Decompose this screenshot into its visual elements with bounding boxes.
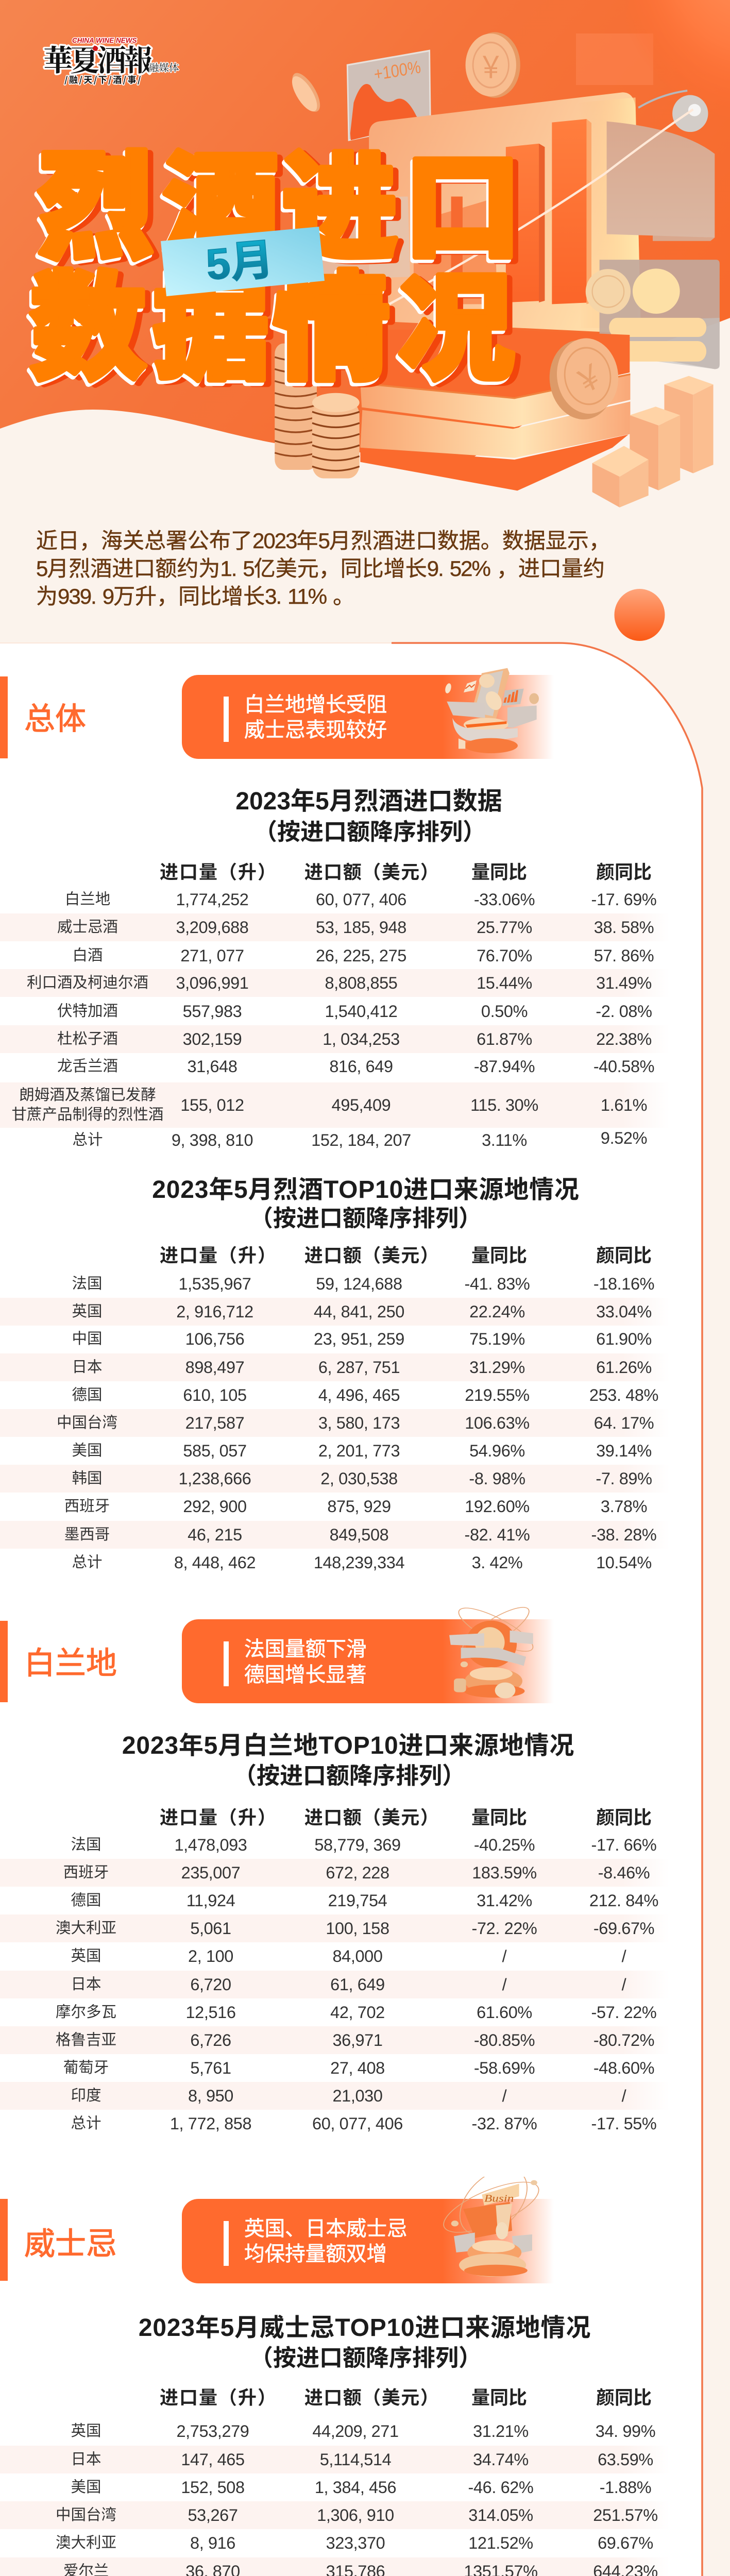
intro text: 为939.9万升，同比增长3.11%。 [36, 584, 354, 608]
glass ball [638, 91, 708, 132]
table 3: brandy top 10 origins: 61, 649 [330, 1975, 385, 1994]
table 3: brandy top 10 origins: 235,007 [181, 1863, 240, 1882]
table 3: brandy top 10 origins: 日本 [71, 1976, 101, 1993]
table 1: spirits: 816, 649 [329, 1057, 393, 1076]
table 3: brandy top 10 origins: 212. 84% [589, 1891, 658, 1910]
table 4: whisky top 10 origins: 63.59% [598, 2450, 653, 2469]
section: overall [0, 675, 550, 759]
table 1: spirits: 1, 034,253 [322, 1030, 400, 1048]
table 1: spirits: -87.94% [474, 1057, 535, 1076]
section: whisky [0, 2199, 550, 2283]
banner: 均保持量额双增 [244, 2243, 387, 2265]
table 2: spirits top 10 origins: 量同比 [471, 1245, 527, 1266]
table 3: brandy top 10 origins: 61.60% [477, 2003, 532, 2022]
table 4: whisky top 10 origins: 152, 508 [181, 2478, 245, 2497]
table 1: spirits: 38. 58% [594, 918, 654, 937]
table 3: brandy top 10 origins: -32. 87% [472, 2114, 537, 2133]
intro text [36, 529, 610, 608]
banner icon: folder and pedestal: Busin [484, 2193, 514, 2204]
title: table 4 [139, 2314, 591, 2371]
logo: 融媒体 [149, 60, 179, 74]
table 2: spirits top 10 origins: 德国 [72, 1386, 102, 1403]
coin stack left [275, 344, 317, 470]
table 3: brandy top 10 origins: 183.59% [472, 1863, 537, 1882]
title: table 2 [152, 1176, 580, 1231]
table 1: spirits [0, 861, 656, 1149]
title: table 4: 2023年5月威士忌TOP10进口来源地情况 [139, 2314, 591, 2342]
table 3: brandy top 10 origins: 5,061 [190, 1919, 231, 1938]
table 2: spirits top 10 origins: 2, 030,538 [320, 1469, 398, 1488]
table 3: brandy top 10 origins: 42, 702 [330, 2003, 385, 2022]
table 3: brandy top 10 origins: 量同比 [471, 1807, 527, 1828]
table 4: whisky top 10 origins: 量同比 [471, 2387, 527, 2408]
table 4: whisky top 10 origins: 2,753,279 [176, 2422, 249, 2441]
table 2: spirits top 10 origins: 23, 951, 259 [314, 1330, 404, 1348]
table 2: spirits top 10 origins: 22.24% [469, 1302, 525, 1321]
table 2: spirits top 10 origins: 西班牙 [64, 1498, 110, 1515]
table 2: spirits top 10 origins: 898,497 [185, 1358, 244, 1377]
table 1: spirits: 白酒 [72, 947, 103, 964]
table 1: spirits: 155, 012 [180, 1096, 244, 1114]
accent bar [0, 2199, 8, 2281]
table 3: brandy top 10 origins: 1, 772, 858 [170, 2114, 251, 2133]
table 3: brandy top 10 origins: -58.69% [474, 2059, 535, 2077]
banner: 德国增长显著 [244, 1664, 366, 1686]
table 2: spirits top 10 origins: 849,508 [330, 1526, 388, 1544]
logo [42, 37, 179, 86]
banner [182, 2199, 554, 2283]
table 2: spirits top 10 origins: -18.16% [593, 1275, 654, 1293]
table 2: spirits top 10 origins: 总计 [72, 1554, 102, 1571]
table 1: spirits: 31.49% [596, 974, 652, 992]
table 4: whisky top 10 origins: 美国 [71, 2479, 101, 2496]
table 3: brandy top 10 origins: 摩尔多瓦 [56, 2004, 116, 2021]
table 1: spirits: 量同比 [471, 861, 527, 883]
table 3: brandy top 10 origins: 印度 [71, 2087, 101, 2104]
month badge: 5月 [204, 235, 276, 289]
table 4: whisky top 10 origins: 进口额（美元） [304, 2387, 439, 2408]
table 1: spirits: 龙舌兰酒 [57, 1058, 118, 1075]
table 3: brandy top 10 origins: -57. 22% [591, 2003, 656, 2022]
table 1: spirits: 总计 [72, 1131, 103, 1148]
table 2: spirits top 10 origins: 3, 580, 173 [318, 1414, 400, 1432]
hero background [0, 0, 730, 456]
table 2: spirits top 10 origins: 韩国 [72, 1470, 102, 1487]
table 1: spirits: 3.11% [482, 1131, 527, 1149]
table 4: whisky top 10 origins: 颜同比 [596, 2387, 652, 2408]
table 1: spirits: 31,648 [187, 1057, 237, 1076]
table 4: whisky top 10 origins: 进口量（升） [160, 2387, 277, 2408]
banner: 白兰地增长受阻 [244, 693, 387, 716]
table 4: whisky top 10 origins: 323,370 [326, 2534, 385, 2552]
table 4: whisky top 10 origins: -46. 62% [468, 2478, 533, 2497]
coin top [466, 32, 520, 98]
table 3: brandy top 10 origins: 进口量（升） [160, 1807, 277, 1828]
table 3: brandy top 10 origins: 法国 [71, 1836, 101, 1853]
table 1: spirits: 557,983 [183, 1002, 242, 1021]
table 2: spirits top 10 origins: -8. 98% [469, 1469, 525, 1488]
table 2: spirits top 10 origins: 46, 215 [188, 1526, 242, 1544]
table 2: spirits top 10 origins: 33.04% [596, 1302, 652, 1321]
table 3: brandy top 10 origins: -80.72% [593, 2031, 654, 2049]
table 3: brandy top 10 origins: 100, 158 [326, 1919, 389, 1938]
table 3: brandy top 10 origins: 21,030 [332, 2087, 382, 2105]
table 1: spirits: 1.61% [601, 1096, 647, 1114]
table 4: whisky top 10 origins: 31.21% [473, 2422, 529, 2441]
table 2: spirits top 10 origins: 61.90% [596, 1330, 652, 1348]
table 1: spirits: 76.70% [477, 946, 532, 965]
section label: 白兰地 [24, 1646, 117, 1681]
table 3: brandy top 10 origins: 5,761 [190, 2059, 231, 2077]
logo: 華夏酒報 [43, 37, 153, 79]
table 1: spirits: 利口酒及柯迪尔酒 [27, 974, 148, 991]
orange ellipse [614, 589, 665, 641]
table 1: spirits: 8,808,855 [325, 974, 397, 992]
table 2: spirits top 10 origins: 292, 900 [183, 1497, 247, 1516]
table 3: brandy top 10 origins: 27, 408 [330, 2059, 385, 2077]
table 1: spirits: 60, 077, 406 [316, 890, 406, 909]
table 3: brandy top 10 origins: / [622, 1947, 626, 1965]
table 3: brandy top 10 origins: -48.60% [593, 2059, 654, 2077]
table 2: spirits top 10 origins: 中国台湾 [57, 1414, 117, 1431]
section: brandy [0, 1619, 550, 1703]
table 1: spirits: 9.52% [601, 1129, 647, 1147]
intro text: 近日，海关总署公布了2023年5月烈酒进口数据。数据显示， [36, 529, 610, 553]
table 1: spirits: 甘蔗产品制得的烈性酒 [11, 1106, 164, 1123]
table 2: spirits top 10 origins: 1,238,666 [178, 1469, 251, 1488]
table 3: brandy top 10 origins: 6,720 [190, 1975, 231, 1994]
table 3: brandy top 10 origins: 西班牙 [63, 1864, 109, 1881]
big yen coin [538, 324, 630, 433]
title: table 2: 2023年5月烈酒TOP10进口来源地情况 [152, 1176, 580, 1204]
hero illustration [274, 32, 720, 507]
table 4: whisky top 10 origins: 澳大利亚 [56, 2534, 116, 2551]
title: table 3: （按进口额降序排列） [233, 1762, 465, 1789]
month badge [161, 227, 325, 296]
table 4: whisky top 10 origins [0, 2387, 658, 2576]
table 1: spirits: -40.58% [593, 1057, 654, 1076]
stacked platform [360, 330, 630, 490]
table 4: whisky top 10 origins: 5,114,514 [320, 2450, 391, 2469]
table 2: spirits top 10 origins: 192.60% [465, 1497, 530, 1516]
table 4: whisky top 10 origins: 中国台湾 [56, 2506, 116, 2523]
accent bar [0, 676, 8, 758]
table 3: brandy top 10 origins: / [502, 1975, 506, 1994]
table 1: spirits: 1,540,412 [325, 1002, 397, 1021]
big yen coin: ￥ [565, 347, 610, 406]
table 2: spirits top 10 origins: 54.96% [469, 1442, 525, 1460]
table 2: spirits top 10 origins: -38. 28% [591, 1526, 656, 1544]
table 1: spirits: 57. 86% [594, 946, 654, 965]
table 1: spirits: 进口额（美元） [304, 861, 439, 883]
table 1: spirits: -17. 69% [591, 890, 656, 909]
table 2: spirits top 10 origins: 64. 17% [594, 1414, 654, 1432]
title: table 3: 2023年5月白兰地TOP10进口来源地情况 [122, 1732, 574, 1759]
table 1: spirits: 3,096,991 [176, 974, 248, 992]
table 2: spirits top 10 origins: 44, 841, 250 [314, 1302, 404, 1321]
table 3: brandy top 10 origins: 12,516 [185, 2003, 236, 2022]
table 2: spirits top 10 origins: 6, 287, 751 [318, 1358, 400, 1377]
table 2: spirits top 10 origins: 日本 [72, 1359, 102, 1376]
table 2: spirits top 10 origins: 610, 105 [183, 1386, 247, 1404]
intro text: 5月烈酒进口额约为1.5亿美元，同比增长9.52%，进口量约 [36, 556, 605, 581]
block tall [664, 376, 714, 473]
table 1: spirits: 22.38% [596, 1030, 652, 1048]
table 2: spirits top 10 origins: 253. 48% [589, 1386, 658, 1404]
table 3: brandy top 10 origins: 总计 [71, 2115, 101, 2132]
table 2: spirits top 10 origins: 1,535,967 [178, 1275, 251, 1293]
table 1: spirits: 进口量（升） [160, 861, 277, 883]
table 2: spirits top 10 origins: 颜同比 [596, 1245, 652, 1266]
glass card [586, 260, 720, 369]
table 3: brandy top 10 origins: -40.25% [474, 1836, 535, 1854]
table 3: brandy top 10 origins: 进口额（美元） [304, 1807, 439, 1828]
table 3: brandy top 10 origins: 60, 077, 406 [312, 2114, 403, 2133]
table 3: brandy top 10 origins: 58,779, 369 [314, 1836, 401, 1854]
table 1: spirits: 威士忌酒 [57, 919, 118, 936]
section label: 威士忌 [24, 2227, 117, 2261]
table 3: brandy top 10 origins: / [622, 1975, 626, 1994]
table 2: spirits top 10 origins: 墨西哥 [64, 1526, 110, 1543]
table 2: spirits top 10 origins: 75.19% [469, 1330, 525, 1348]
monitor [296, 92, 641, 333]
table 4: whisky top 10 origins: 147, 465 [181, 2450, 245, 2469]
banner: 法国量额下滑 [244, 1638, 366, 1660]
logo: /融/天/下/酒/事/ [64, 73, 142, 86]
table 3: brandy top 10 origins: -17. 55% [591, 2114, 656, 2133]
table 1: spirits: -33.06% [474, 890, 535, 909]
glass ribbon [607, 122, 715, 241]
table 2: spirits top 10 origins: 106.63% [465, 1414, 530, 1432]
table 2: spirits top 10 origins: 31.29% [469, 1358, 525, 1377]
table 3: brandy top 10 origins: -72. 22% [472, 1919, 537, 1938]
table 3: brandy top 10 origins: / [502, 1947, 506, 1965]
table 2: spirits top 10 origins: 进口额（美元） [304, 1245, 439, 1266]
table 3: brandy top 10 origins: 219,754 [328, 1891, 387, 1910]
table 4: whisky top 10 origins: 34.74% [473, 2450, 529, 2469]
table 2: spirits top 10 origins: 585, 057 [183, 1442, 247, 1460]
table 2: spirits top 10 origins: 法国 [72, 1275, 102, 1292]
table 4: whisky top 10 origins: 53,267 [188, 2506, 238, 2524]
logo: CHINA WINE NEWS [72, 37, 137, 44]
table 1: spirits: 颜同比 [596, 861, 652, 883]
table 2: spirits top 10 origins: 3. 42% [472, 1553, 522, 1572]
bar [552, 119, 591, 304]
table 1: spirits: 0.50% [481, 1002, 528, 1021]
table 1: spirits: 3,209,688 [176, 918, 248, 937]
table 3: brandy top 10 origins: / [622, 2087, 626, 2105]
table 2: spirits top 10 origins: 进口量（升） [160, 1245, 277, 1266]
table 3: brandy top 10 origins [0, 1807, 658, 2133]
table 2: spirits top 10 origins: 148,239,334 [314, 1553, 404, 1572]
table 1: spirits: 朗姆酒及蒸馏已发酵 [19, 1087, 156, 1104]
table 3: brandy top 10 origins: 8, 950 [188, 2087, 233, 2105]
coin stack right [312, 393, 360, 479]
white content panel [0, 642, 703, 2576]
table 2: spirits top 10 origins: 217,587 [185, 1414, 244, 1432]
table 2: spirits top 10 origins: 59, 124,688 [316, 1275, 402, 1293]
table 3: brandy top 10 origins: 84,000 [332, 1947, 382, 1965]
table 3: brandy top 10 origins: 颜同比 [596, 1807, 652, 1828]
small flying coin [286, 67, 325, 117]
table 3: brandy top 10 origins: -80.85% [474, 2031, 535, 2049]
coin top: ￥ [478, 42, 504, 87]
table 3: brandy top 10 origins: 11,924 [186, 1891, 235, 1910]
title: table 4: （按进口额降序排列） [250, 2345, 482, 2371]
table 2: spirits top 10 origins: 2, 201, 773 [318, 1442, 400, 1460]
table 1: spirits: 伏特加酒 [57, 1003, 118, 1020]
table 4: whisky top 10 origins: 314.05% [468, 2506, 533, 2524]
table 1: spirits: 115. 30% [470, 1096, 538, 1114]
table 3: brandy top 10 origins: 格鲁吉亚 [56, 2031, 116, 2048]
table 3: brandy top 10 origins: 31.42% [477, 1891, 532, 1910]
table 2: spirits top 10 origins: 中国 [72, 1330, 102, 1347]
banner icon: coin ring and pedestal [449, 1607, 534, 1698]
table 3: brandy top 10 origins: 英国 [71, 1947, 101, 1964]
table 4: whisky top 10 origins: 34. 99% [596, 2422, 655, 2441]
table 1: spirits: 302,159 [183, 1030, 242, 1048]
table 1: spirits: -2. 08% [596, 1002, 652, 1021]
table 4: whisky top 10 origins: 121.52% [468, 2534, 533, 2552]
table 4: whisky top 10 origins: 日本 [71, 2451, 101, 2468]
table 2: spirits top 10 origins: -7. 89% [596, 1469, 652, 1488]
table 2: spirits top 10 origins: 10.54% [596, 1553, 652, 1572]
title: table 1: 2023年5月烈酒进口数据 [235, 788, 502, 815]
title: table 1 [235, 788, 502, 845]
table 1: spirits: 53, 185, 948 [316, 918, 406, 937]
table 2: spirits top 10 origins: 2, 916,712 [176, 1302, 253, 1321]
table 2: spirits top 10 origins: -41. 83% [465, 1275, 530, 1293]
title: table 3 [122, 1732, 574, 1789]
bar [506, 144, 545, 302]
table 3: brandy top 10 origins: 德国 [71, 1892, 101, 1909]
table 1: spirits: 271, 077 [180, 946, 244, 965]
table 2: spirits top 10 origins: -82. 41% [465, 1526, 530, 1544]
table 2: spirits top 10 origins: 219.55% [465, 1386, 530, 1404]
banner icon: folder and pedestal [443, 2177, 539, 2277]
block small [592, 446, 649, 507]
table 1: spirits: 495,409 [332, 1096, 391, 1114]
table 2: spirits top 10 origins: 8, 448, 462 [174, 1553, 256, 1572]
table 2: spirits top 10 origins: 4, 496, 465 [318, 1386, 400, 1404]
table 2: spirits top 10 origins [0, 1245, 658, 1572]
title: table 1: （按进口额降序排列） [254, 819, 486, 845]
table 2: spirits top 10 origins: 3.78% [601, 1497, 647, 1516]
table 4: whisky top 10 origins: 英国 [71, 2422, 101, 2439]
table 3: brandy top 10 origins: 6,726 [190, 2031, 231, 2049]
table 1: spirits: 61.87% [477, 1030, 532, 1048]
table 3: brandy top 10 origins: 36,971 [332, 2031, 382, 2049]
table 3: brandy top 10 origins: -17. 66% [591, 1836, 656, 1854]
table 3: brandy top 10 origins: 葡萄牙 [63, 2059, 109, 2076]
table 3: brandy top 10 origins: 1,478,093 [174, 1836, 247, 1854]
table 1: spirits: 152, 184, 207 [311, 1131, 411, 1149]
table 2: spirits top 10 origins: 106,756 [185, 1330, 244, 1348]
table 4: whisky top 10 origins: 251.57% [593, 2506, 658, 2524]
table 3: brandy top 10 origins: -8.46% [598, 1863, 650, 1882]
table 2: spirits top 10 origins: 39.14% [596, 1442, 652, 1460]
banner [182, 675, 554, 759]
table 2: spirits top 10 origins: 英国 [72, 1303, 102, 1320]
banner: 威士忌表现较好 [244, 719, 387, 741]
table 1: spirits: 1,774,252 [176, 890, 248, 909]
table 4: whisky top 10 origins: 1,306, 910 [317, 2506, 394, 2524]
+100% card: +100% [373, 57, 422, 84]
table 2: spirits top 10 origins: 875, 929 [327, 1497, 391, 1516]
table 4: whisky top 10 origins: -1.88% [600, 2478, 651, 2497]
table 1: spirits: 25.77% [477, 918, 532, 937]
table 1: spirits: 26, 225, 275 [316, 946, 406, 965]
table 1: spirits: 杜松子酒 [57, 1030, 118, 1047]
banner [182, 1619, 554, 1703]
section label: 总体 [24, 702, 86, 736]
growth line [389, 109, 693, 304]
banner: 英国、日本威士忌 [244, 2217, 408, 2240]
table 3: brandy top 10 origins: 澳大利亚 [56, 1920, 116, 1937]
banner icon: tablet, coins and ribbon [445, 668, 539, 753]
table 4: whisky top 10 origins: 69.67% [598, 2534, 653, 2552]
table 4: whisky top 10 origins: 1, 384, 456 [315, 2478, 396, 2497]
accent bar [0, 1621, 8, 1702]
table 1: spirits: 9, 398, 810 [172, 1131, 253, 1149]
table 3: brandy top 10 origins: / [502, 2087, 506, 2105]
title: table 2: （按进口额降序排列） [250, 1205, 482, 1231]
block mid [630, 406, 680, 490]
title [26, 137, 525, 394]
table 3: brandy top 10 origins: -69.67% [593, 1919, 654, 1938]
table 4: whisky top 10 origins: 8, 916 [190, 2534, 235, 2552]
table 1: spirits: 15.44% [477, 974, 532, 992]
table 4: whisky top 10 origins: 44,209, 271 [312, 2422, 399, 2441]
table 3: brandy top 10 origins: 2, 100 [188, 1947, 233, 1965]
table 2: spirits top 10 origins: 美国 [72, 1442, 102, 1459]
table 1: spirits: 白兰地 [65, 891, 110, 908]
+100% card [347, 50, 430, 140]
table 2: spirits top 10 origins: 61.26% [596, 1358, 652, 1377]
table 3: brandy top 10 origins: 672, 228 [326, 1863, 389, 1882]
